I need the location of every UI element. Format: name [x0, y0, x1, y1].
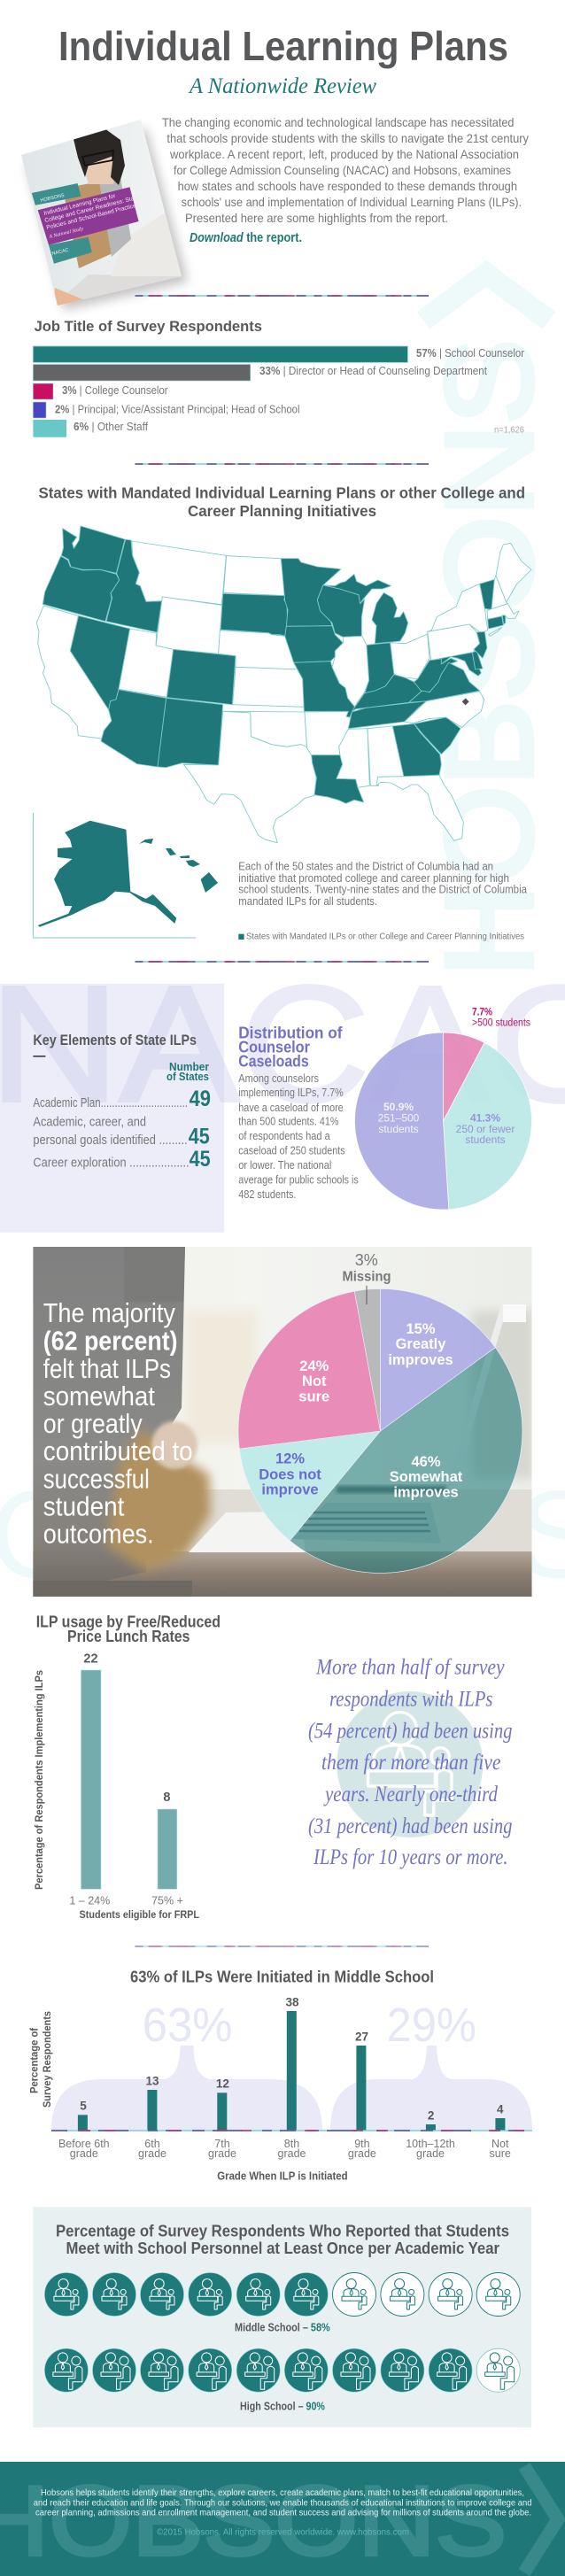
italic quote: respondents with ILPs — [329, 1686, 493, 1712]
panel: key elements of state ILPs: of States — [166, 1071, 209, 1083]
bar chart: grade when ILP is initiated: 5 — [80, 2100, 87, 2113]
map legend: States with Mandated ILPs or other College and Career Planning Initiatives — [246, 932, 524, 942]
intro text: The changing economic and technological landscape has necessitated — [162, 115, 514, 129]
bar chart: grade when ILP is initiated: 6th — [144, 2138, 160, 2150]
heading: states with mandated ILPs: States with Mandated Individual Learning Plans or other College and — [39, 484, 525, 502]
report cover image: Individual Learning Plans for — [43, 193, 117, 217]
subtitle: A Nationwide Review — [188, 74, 376, 98]
panel: key elements of state ILPs — [33, 1033, 211, 1172]
pie chart: counselor caseloads: >500 students — [472, 1018, 530, 1029]
pie chart: effect on student outcomes: 12% — [275, 1451, 305, 1467]
italic quote: them for more than five — [321, 1749, 501, 1775]
report cover image — [21, 120, 188, 310]
photo callout text: The majority — [43, 1297, 175, 1328]
map description text: Each of the 50 states and the District of Columbia had an — [238, 861, 493, 873]
map description text: initiative that promoted college and career planning for high — [238, 872, 509, 885]
heading: states with mandated ILPs: Career Planning Initiatives — [188, 502, 376, 520]
heading: distribution of counselor caseloads: Counselor — [238, 1038, 310, 1056]
heading: distribution of counselor caseloads: Caseloads — [238, 1052, 309, 1071]
caption: high school: High School – 90% — [240, 2401, 325, 2413]
southern states — [183, 711, 463, 843]
panel: key elements of state ILPs: Academic, career, and — [33, 1115, 146, 1130]
bar chart: job title of survey respondents: 57% | School Counselor — [416, 347, 524, 360]
caseload text: average for public schools is — [238, 1174, 359, 1187]
panel: key elements of state ILPs: Academic Plan............................... — [33, 1095, 188, 1110]
pie chart: effect on student outcomes: Does not — [259, 1467, 321, 1483]
pie chart: counselor caseloads: 7.7% — [472, 1008, 492, 1018]
panel: key elements of state ILPs: Key Elements of State ILPs — [33, 1033, 197, 1048]
watermark: NACAC: NACAC — [0, 953, 565, 1136]
caseload text: or lower. The national — [238, 1159, 331, 1172]
pie chart: counselor caseloads: 251–500 — [378, 1112, 420, 1125]
pie chart: effect on student outcomes: Missing — [342, 1270, 391, 1285]
western states — [36, 526, 304, 768]
intro text: that schools provide students with the skills to navigate the 21st century — [166, 131, 529, 145]
icon: counselor behind quote — [337, 1691, 483, 1837]
caseload text: caseload of 250 students — [238, 1145, 345, 1157]
bar chart: ILP usage by FRPL: 22 — [83, 1652, 98, 1666]
pie chart: effect on student outcomes: Greatly — [396, 1336, 446, 1352]
pie chart: counselor caseloads: 250 or fewer — [456, 1123, 515, 1135]
report cover image: HOBSONS — [40, 193, 66, 204]
map description text — [238, 861, 527, 908]
pie chart: effect on student outcomes: 46% — [411, 1454, 441, 1470]
caption: middle school: Middle School – 58% — [235, 2322, 330, 2334]
pie chart: effect on student outcomes: sure — [298, 1389, 329, 1405]
pie chart: counselor caseloads: students — [378, 1123, 419, 1135]
bar chart: grade when ILP is initiated: grade — [348, 2147, 376, 2160]
bar chart: grade when ILP is initiated: sure — [490, 2147, 511, 2160]
bar chart: grade when ILP is initiated: Grade When ILP is Initiated — [217, 2170, 348, 2183]
panel: key elements background — [0, 984, 224, 1233]
panel heading: Meet with School Personnel at Least Once per Academic Year — [66, 2239, 499, 2257]
bar chart: grade when ILP is initiated: 4 — [497, 2102, 504, 2116]
report cover image: College and Career Readiness: State — [44, 195, 140, 224]
bar chart: grade when ILP is initiated: 9th — [354, 2138, 370, 2150]
map: contiguous United States — [36, 526, 531, 843]
pie chart: effect on student outcomes: improves — [388, 1352, 453, 1368]
pie chart: counselor caseloads: students — [465, 1133, 506, 1146]
photo: student with laptop — [18, 1247, 549, 1600]
intro text: Presented here are some highlights from the report. — [185, 211, 448, 225]
intro text: schools' use and implementation of Individual Learning Plans (ILPs). — [182, 195, 522, 209]
map description text: school students. Twenty-nine states and the District of Columbia — [238, 884, 527, 896]
heading: distribution of counselor caseloads: Distribution of — [238, 1024, 343, 1042]
report cover image: A National Study — [48, 226, 84, 240]
report cover image: Policies and School-Based Practices — [46, 202, 140, 231]
italic quote: ILPs for 10 years or more. — [313, 1844, 508, 1869]
bar chart: grade when ILP is initiated: grade — [70, 2147, 98, 2160]
bar chart: grade when ILP is initiated: 27 — [355, 2030, 368, 2043]
italic quote: More than half of survey — [315, 1654, 505, 1680]
heading: job title: Job Title of Survey Respondents — [35, 318, 262, 335]
caseload text — [238, 1072, 359, 1201]
brace: middle school 63 percent: 63% — [143, 1999, 232, 2052]
bar chart: grade when ILP is initiated: grade — [138, 2147, 166, 2160]
pie chart: effect on student outcomes: Not — [302, 1373, 327, 1389]
map inset: Alaska and Hawaii — [33, 813, 218, 938]
bar chart: ILP usage by FRPL — [33, 1652, 199, 1921]
heading: ILP usage by FRPL — [36, 1613, 221, 1645]
photo callout text: contributed to — [43, 1435, 193, 1466]
italic quote: (31 percent) had been using — [308, 1813, 512, 1838]
eastern states — [281, 543, 531, 729]
report cover image: NACAC — [51, 248, 69, 257]
bar chart: grade when ILP is initiated: grade — [416, 2147, 445, 2160]
photo callout text — [43, 1297, 193, 1550]
bar chart: ILP usage by FRPL: 8 — [163, 1791, 170, 1805]
bar chart: job title of survey respondents: 3% | College Counselor — [62, 384, 168, 397]
caseload text: than 500 students. 41% — [238, 1116, 338, 1128]
italic quote: (54 percent) had been using — [308, 1718, 512, 1744]
bar chart: grade when ILP is initiated: 8th — [284, 2138, 299, 2150]
bar chart: grade when ILP is initiated: Not — [491, 2138, 509, 2150]
heading: ILPs initiated in middle school: 63% of ILPs Were Initiated in Middle School — [130, 1967, 434, 1985]
bar chart: job title of survey respondents — [33, 346, 524, 437]
caseload text: 482 students. — [238, 1188, 296, 1201]
caseload text: Among counselors — [238, 1072, 319, 1085]
photo callout text: or greatly — [43, 1408, 143, 1439]
icon row: high school 90 percent — [44, 2348, 520, 2392]
caseload text: of respondents had a — [238, 1130, 330, 1142]
bar chart: ILP usage by FRPL: Students eligible for FRPL — [80, 1908, 199, 1921]
bar chart: grade when ILP is initiated: 13 — [145, 2074, 159, 2087]
pie chart: effect on student outcomes: Somewhat — [390, 1469, 463, 1485]
heading: ILP usage by FRPL: ILP usage by Free/Reduced — [36, 1613, 221, 1631]
watermark: vertical Hobsons wordmark: HOBSONS — [421, 339, 558, 977]
bar chart: grade when ILP is initiated: 2 — [428, 2108, 434, 2122]
heading: distribution of counselor caseloads — [238, 1024, 343, 1071]
title: Individual Learning Plans — [58, 23, 508, 69]
panel: key elements of state ILPs: Career exploration ................... — [33, 1156, 190, 1171]
bar chart: grade when ILP is initiated: 10th–12th — [406, 2138, 455, 2150]
photo callout text: student — [43, 1491, 125, 1522]
bar chart: grade when ILP is initiated: 7th — [214, 2138, 230, 2150]
bar chart: grade when ILP is initiated: Before 6th — [58, 2138, 110, 2150]
intro text: for College Admission Counseling (NACAC) and Hobsons, examines — [174, 163, 511, 177]
photo callout text: successful — [43, 1464, 150, 1495]
bar chart: grade when ILP is initiated: grade — [278, 2147, 306, 2160]
download link: Download the report. — [190, 231, 302, 245]
bar chart: job title of survey respondents: 6% | Other Staff — [74, 421, 148, 433]
panel: key elements of state ILPs: 49 — [190, 1087, 211, 1111]
photo callout text: (62 percent) — [43, 1325, 178, 1356]
intro text: how states and schools have responded to these demands through — [178, 179, 517, 193]
panel heading: Percentage of Survey Respondents Who Reported that Students — [56, 2223, 509, 2240]
footer text: Hobsons helps students identify their strengths, explore careers, create academic plans, match to best-fit educational opportunities, — [41, 2487, 524, 2498]
bar chart: grade when ILP is initiated: Survey Respondents — [41, 2011, 53, 2108]
photo callout text: somewhat — [43, 1381, 155, 1412]
panel: meetings with school personnel — [33, 2207, 531, 2427]
panel: key elements of state ILPs: 45 — [189, 1125, 210, 1149]
bar chart: grade when ILP is initiated: 12 — [216, 2077, 229, 2091]
pie chart: effect on student outcomes: improve — [261, 1482, 319, 1498]
photo callout text: felt that ILPs — [43, 1353, 171, 1384]
bar chart: grade when ILP is initiated — [28, 1995, 532, 2183]
panel: key elements of state ILPs: Number — [169, 1061, 209, 1073]
bar chart: ILP usage by FRPL: 1 – 24% — [69, 1895, 110, 1907]
pie chart: effect on student outcomes: improves — [393, 1485, 459, 1501]
brace: high school 29 percent: 29% — [386, 1999, 476, 2052]
intro text: workplace. A recent report, left, produced by the National Association — [169, 147, 519, 161]
bar chart: job title of survey respondents: 2% | Principal; Vice/Assistant Principal; Head of School — [55, 404, 299, 416]
heading: ILP usage by FRPL: Price Lunch Rates — [67, 1628, 190, 1645]
bar chart: grade when ILP is initiated: 38 — [285, 1995, 299, 2008]
heading: states with mandated ILPs — [39, 484, 525, 520]
caseload text: implementing ILPs, 7.7% — [238, 1087, 344, 1099]
bar chart: ILP usage by FRPL: Percentage of Respondents Implementing ILPs — [33, 1670, 45, 1890]
pie chart: effect on student outcomes: 3% — [355, 1251, 378, 1269]
footer — [0, 2462, 565, 2576]
pie chart: effect on student outcomes: 15% — [406, 1321, 436, 1337]
italic quote: years. Nearly one-third — [323, 1781, 498, 1806]
panel heading — [56, 2223, 509, 2257]
italic quote — [308, 1654, 512, 1869]
pie chart: counselor caseloads: 41.3% — [470, 1112, 500, 1125]
pie chart: counselor caseloads — [354, 1008, 531, 1210]
panel: key elements of state ILPs: 45 — [190, 1147, 211, 1172]
bar chart: job title of survey respondents: 33% | Director or Head of Counseling Department — [259, 365, 487, 377]
panel: key elements of state ILPs: personal goals identified ......... — [33, 1133, 188, 1148]
copyright: ©2015 Hobsons. All rights reserved worldwide. www.hobsons.com — [157, 2527, 409, 2538]
footer text — [34, 2487, 532, 2518]
pie chart: counselor caseloads: 50.9% — [383, 1101, 414, 1113]
icon row: middle school 58 percent — [44, 2272, 520, 2317]
pie chart: effect on student outcomes — [238, 1251, 522, 1573]
map description text: mandated ILPs for all students. — [238, 895, 377, 908]
brace: middle school 63 percent — [51, 1999, 322, 2131]
brace: high school 29 percent — [330, 1999, 532, 2131]
bar chart: ILP usage by FRPL: 75% + — [151, 1895, 183, 1907]
bar chart: job title of survey respondents: n=1,626 — [494, 426, 524, 436]
watermark: letters behind photo — [0, 1465, 565, 1604]
bar chart: grade when ILP is initiated: grade — [208, 2147, 236, 2160]
bar chart: grade when ILP is initiated: Percentage of — [28, 2027, 41, 2093]
caseload text: have a caseload of more — [238, 1102, 344, 1114]
intro text — [162, 115, 529, 225]
pie chart: effect on student outcomes: 24% — [299, 1358, 329, 1374]
photo callout text: outcomes. — [43, 1519, 154, 1550]
